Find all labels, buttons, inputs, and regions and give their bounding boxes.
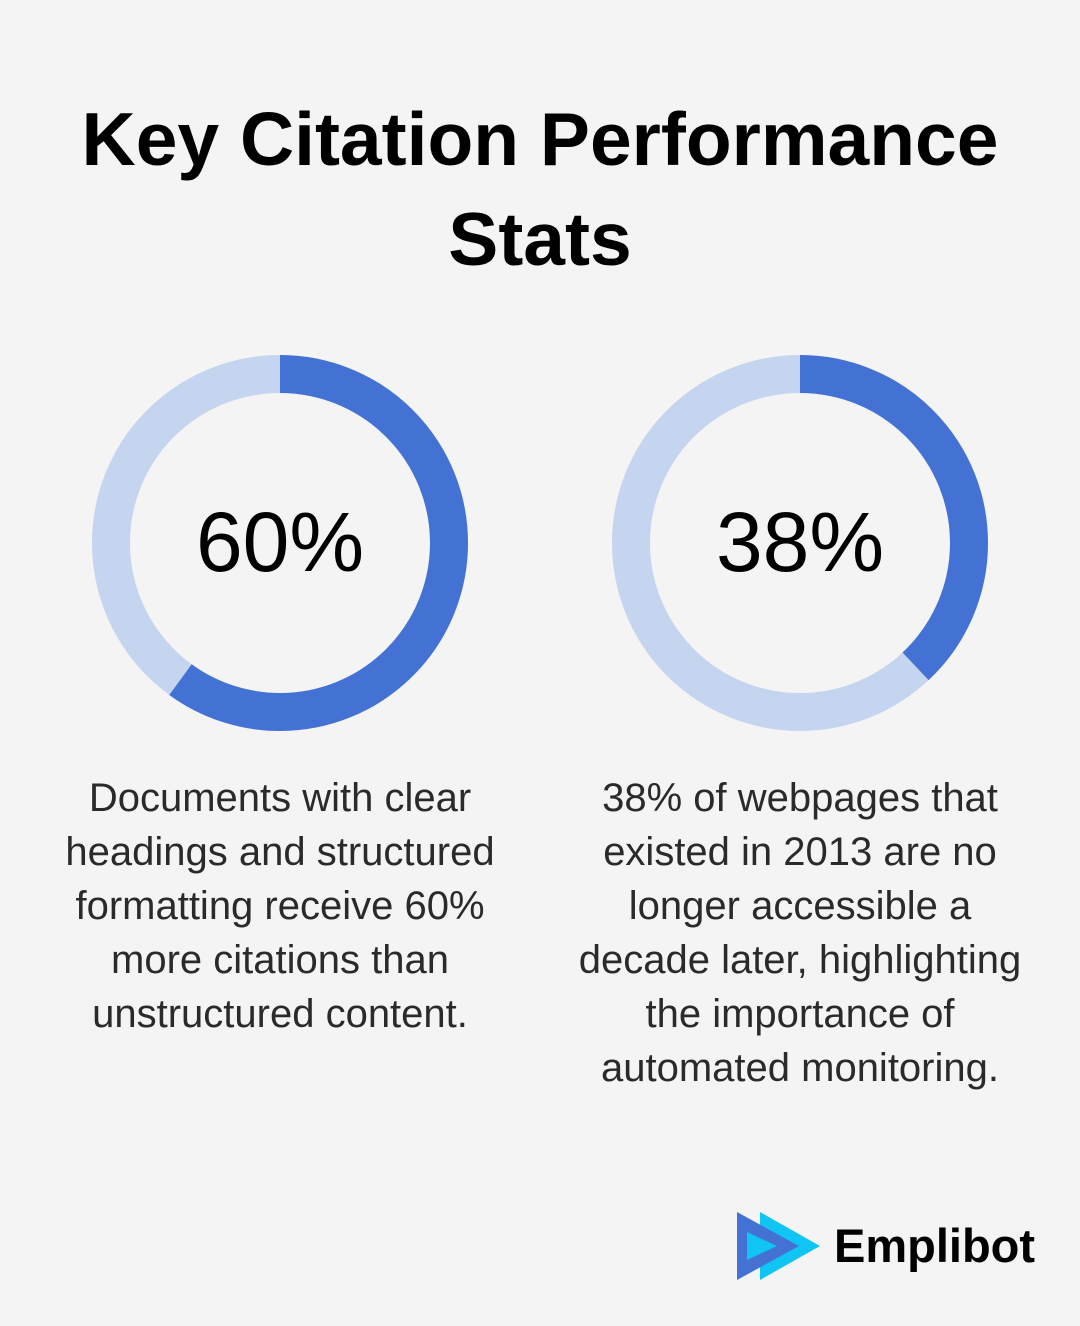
text: 38% description: existed in 2013 are no: [603, 830, 997, 874]
text: 60% description: Documents with clear: [89, 776, 471, 820]
logo: [737, 1212, 1035, 1280]
title: Key Citation Performance: [82, 97, 998, 181]
text: 60% description: more citations than: [111, 938, 449, 982]
logo text: Emplibot: [834, 1219, 1035, 1272]
icon: play triangles: [737, 1212, 820, 1280]
text: 60% description: [65, 776, 495, 1036]
text: 38% description: the importance of: [645, 992, 955, 1036]
text: 38% description: decade later, highlighting: [579, 938, 1021, 982]
text: 60% description: headings and structured: [65, 830, 495, 874]
text: 38% description: 38% of webpages that: [602, 776, 998, 820]
text: 60% description: formatting receive 60%: [75, 884, 485, 928]
text: 38% description: automated monitoring.: [601, 1046, 999, 1090]
title: Stats: [448, 197, 632, 281]
text: 38% description: longer accessible a: [629, 884, 971, 928]
text: 60% description: unstructured content.: [92, 992, 468, 1036]
donut: 60%: [92, 355, 468, 731]
donut: 38%: 38%: [716, 495, 884, 589]
title: [82, 97, 998, 281]
donut: 60%: 60%: [196, 495, 364, 589]
text: 38% description: [579, 776, 1021, 1090]
donut: 38%: [612, 355, 988, 731]
